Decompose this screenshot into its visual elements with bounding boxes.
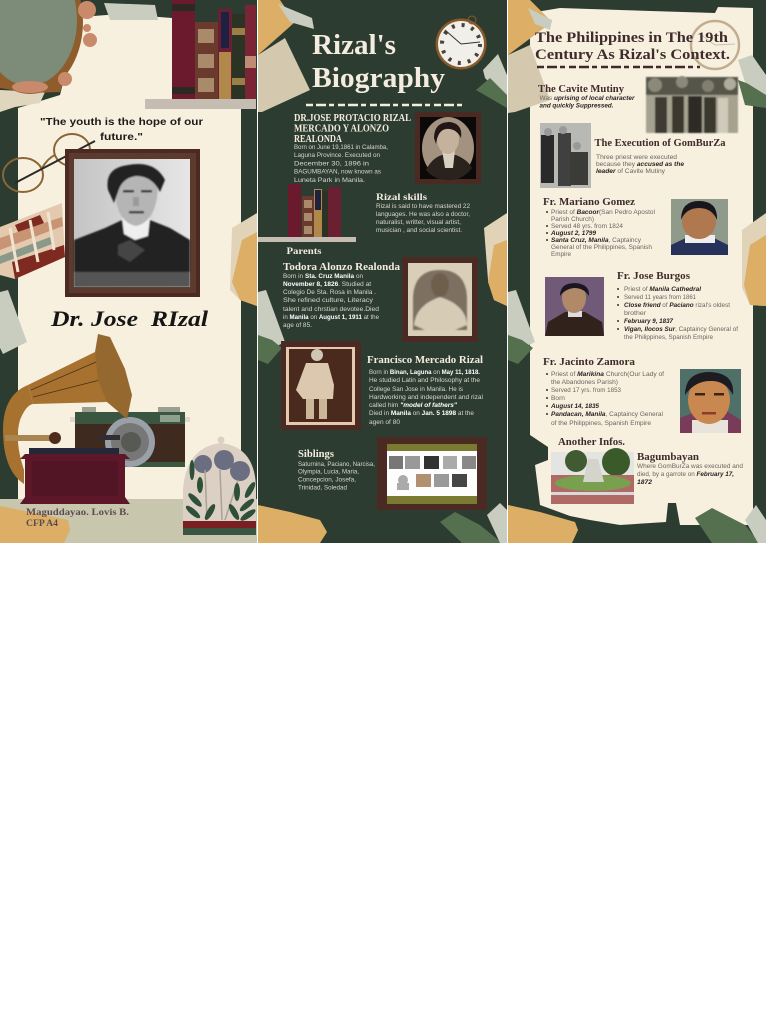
icon: oval mirror bbox=[0, 0, 97, 94]
tape left bbox=[0, 290, 27, 354]
panel: biography bbox=[258, 0, 507, 543]
torn scraps top-left bbox=[508, 0, 552, 113]
text: siblings: Concepcion, Josefa, bbox=[298, 476, 356, 484]
text: Rizal skills: Rizal is said to have mastered 22 bbox=[376, 203, 470, 210]
text: Mariano Gomez: General of the Philippines, Spanish bbox=[551, 244, 652, 251]
icon: glasses bbox=[3, 134, 95, 192]
torn scraps top-left bbox=[258, 0, 314, 112]
text: Cavite Mutiny: and quickly Suppressed. bbox=[540, 102, 614, 110]
text: Mariano Gomez: August 2, 1799 bbox=[550, 230, 596, 237]
text: Jose Burgos: Close friend of Paciano rizal's oldest bbox=[624, 302, 730, 309]
text: Bagumbayan: 1872 bbox=[637, 479, 652, 486]
text: siblings: Olympia, Lucia, Maria, bbox=[298, 468, 359, 476]
title: Biography bbox=[312, 63, 445, 94]
tape and leaf left bbox=[258, 290, 285, 364]
text: Execution: because they accused as the bbox=[596, 161, 684, 168]
text: Cavite Mutiny: The Cavite Mutiny bbox=[538, 84, 624, 95]
text: name heading bbox=[294, 113, 411, 145]
leaf and tape bottom-right bbox=[440, 503, 507, 543]
signature: Dr. Jose RIzal bbox=[50, 306, 209, 331]
portrait: Francisco bbox=[281, 341, 361, 430]
text: Francisco: Francisco Mercado Rizal bbox=[367, 355, 483, 366]
title: The Philippines in The 19th bbox=[535, 30, 729, 46]
text: Jacinto Zamora bbox=[543, 357, 664, 427]
text: Todora: in Manila on August 1, 1911 at the bbox=[283, 314, 379, 321]
heading: Another Infos: Another Infos. bbox=[558, 437, 625, 448]
text: birth and death: Born on June 19,1861 in Calamba, bbox=[294, 144, 388, 151]
portrait: Todora bbox=[402, 257, 478, 342]
text: Jose Burgos: February 9, 1837 bbox=[624, 318, 674, 325]
title bbox=[535, 30, 730, 63]
text: birth and death: Luneta Park in Manila. bbox=[294, 177, 365, 184]
photo: siblings bbox=[377, 437, 487, 510]
text: siblings bbox=[298, 449, 375, 492]
text: Rizal skills: languages. He was also a doctor, bbox=[376, 211, 470, 218]
icon: gramophone bbox=[3, 334, 132, 504]
torn scrap right bbox=[742, 213, 766, 306]
text: Bagumbayan: died, by a garrote on February 17, bbox=[637, 471, 734, 478]
text: Jacinto Zamora: Priest of Marikina Church(Our Lady of bbox=[551, 371, 664, 378]
text: Jose Burgos: Fr. Jose Burgos bbox=[617, 271, 690, 282]
text: Todora: Sta. Cruz Manila bbox=[305, 273, 354, 280]
portrait: young Rizal bbox=[415, 112, 481, 184]
text: Todora: Colegio De Sta. Rosa in Manila . bbox=[283, 289, 376, 296]
tape and leaf left bbox=[508, 290, 535, 364]
text: Mariano Gomez: Empire bbox=[551, 251, 571, 258]
text: Cavite Mutiny bbox=[538, 84, 635, 110]
text: Jose Burgos bbox=[617, 271, 738, 341]
text: Todora: November 8, 1826. Studied at bbox=[283, 281, 371, 288]
text: Execution: Three priest were executed bbox=[596, 154, 677, 161]
text: Mariano Gomez: Santa Cruz, Manila, Captaincy bbox=[551, 237, 642, 244]
icon: clock bbox=[436, 16, 486, 70]
icon: textile bbox=[0, 203, 65, 279]
quote: future." bbox=[100, 131, 143, 143]
text: Francisco: called him "model of fathers" bbox=[369, 402, 458, 409]
photo: Bagumbayan bbox=[551, 448, 634, 504]
title bbox=[312, 30, 445, 94]
title: Century As Rizal's Context. bbox=[535, 47, 730, 63]
text: name heading: MERCADO Y ALONZO bbox=[294, 124, 389, 134]
shelf small bbox=[258, 237, 356, 242]
text: Jacinto Zamora: the Abandones Parish) bbox=[551, 379, 618, 386]
torn paper under mirror bbox=[0, 90, 45, 112]
text: siblings: Saturnina, Paciano, Narcisa, bbox=[298, 461, 375, 468]
text: Jacinto Zamora: Fr. Jacinto Zamora bbox=[543, 357, 636, 368]
author: CFP A4 bbox=[26, 518, 59, 528]
icon: books bbox=[172, 0, 256, 99]
text: Rizal skills bbox=[376, 193, 470, 234]
text: Francisco bbox=[367, 355, 483, 426]
text: Rizal skills: musician , and social scientist. bbox=[376, 227, 462, 234]
text: siblings: Trinidad, Soledad bbox=[298, 484, 347, 492]
text: Bagumbayan bbox=[637, 452, 743, 486]
shelf bbox=[145, 99, 256, 109]
author bbox=[26, 507, 129, 528]
portrait: Zamora bbox=[680, 369, 741, 433]
quote: "The youth is the hope of our bbox=[40, 116, 203, 128]
icon: books small bbox=[288, 184, 341, 237]
portrait frame bbox=[65, 149, 200, 297]
text: Todora: Born in bbox=[283, 273, 303, 280]
text: Mariano Gomez: Parish Church) bbox=[551, 216, 594, 223]
tape and leaf top-right bbox=[476, 54, 507, 108]
text: Mariano Gomez: Served 48 yrs. from 1824 bbox=[551, 223, 623, 230]
torn scrap right bbox=[230, 213, 257, 306]
torn scrap bottom-left bbox=[258, 505, 327, 543]
text: Jacinto Zamora: Born bbox=[551, 395, 565, 402]
text: Jose Burgos: the Philippines, Spanish Empire bbox=[624, 334, 713, 341]
text: Francisco: Born in Binan, Laguna on May 11, 1818. bbox=[369, 369, 480, 376]
torn scrap bottom-left bbox=[508, 505, 578, 543]
text: Execution: The Execution of GomBurZa bbox=[594, 138, 726, 149]
torn scrap bottom-left bbox=[0, 506, 70, 543]
photo: Cavite soldiers bbox=[646, 76, 738, 133]
dashed divider bbox=[537, 66, 700, 68]
table bbox=[0, 499, 257, 543]
text: Bagumbayan: Where GomBurZa was executed and bbox=[637, 463, 743, 470]
paper sheet bbox=[18, 14, 241, 543]
text: birth and death: Laguna Province. Executed on bbox=[294, 152, 380, 159]
author: Maguddayao. Lovis B. bbox=[26, 507, 129, 517]
text: Francisco: agen of 80 bbox=[369, 419, 400, 426]
text: Execution: leader of Cavite Mutiny bbox=[596, 168, 666, 175]
text: Francisco: Died in Manila on Jan. 5 1898 at the bbox=[369, 410, 474, 417]
text: siblings: Siblings bbox=[298, 449, 334, 460]
text: Jacinto Zamora: Served 17 yrs. from 1853 bbox=[551, 387, 621, 394]
torn scrap right bbox=[484, 213, 507, 306]
icon: faded clock bbox=[691, 21, 739, 69]
text: birth and death: December 30, 1896 in bbox=[294, 160, 369, 168]
text: Jacinto Zamora: August 14, 1835 bbox=[550, 403, 599, 410]
paper sheet bbox=[530, 7, 753, 525]
tape and leaf right bbox=[738, 55, 766, 108]
photo: GomBurZa bbox=[540, 123, 591, 188]
portrait: Burgos bbox=[545, 277, 604, 336]
portrait: Gomez bbox=[671, 199, 728, 255]
text: Cavite Mutiny: Was uprising of local character bbox=[540, 95, 635, 102]
text: Francisco: Hardworking and independent and rizal bbox=[369, 394, 483, 401]
text: Francisco: He studied Latin and Philosophy at the bbox=[369, 377, 480, 384]
panel: cover bbox=[0, 0, 257, 543]
text: Todora: age of 85. bbox=[283, 322, 312, 329]
text: Todora: Todora Alonzo Realonda bbox=[283, 262, 400, 273]
text: Bagumbayan: Bagumbayan bbox=[637, 452, 699, 463]
text: Rizal skills: naturalist, writter, visual artist, bbox=[376, 219, 461, 226]
text: Jacinto Zamora: of the Philippines, Spanish Empire bbox=[551, 420, 651, 427]
text: Todora: on bbox=[356, 273, 363, 280]
text: Jose Burgos: brother bbox=[624, 310, 647, 317]
text: Rizal skills: Rizal skills bbox=[376, 193, 427, 203]
leaf and tape bottom-right bbox=[695, 505, 766, 543]
text: name heading: REALONDA bbox=[294, 134, 343, 145]
icon: camera bbox=[70, 407, 190, 467]
text: Todora: She refined culture, Literacy bbox=[283, 297, 374, 304]
text: Jose Burgos: Priest of Manila Cathedral bbox=[624, 286, 701, 293]
text: Jose Burgos: Vigan, Ilocos Sur, Captaincy General of bbox=[624, 326, 738, 333]
panel: 19th century context bbox=[508, 0, 766, 543]
heading: parents: Parents bbox=[286, 247, 322, 257]
text: name heading: DR.JOSE PROTACIO RIZAL bbox=[294, 113, 411, 124]
text: Jacinto Zamora: Pandacan, Manila, Captaincy General bbox=[551, 411, 663, 418]
quote bbox=[40, 116, 203, 143]
text: Mariano Gomez bbox=[543, 197, 655, 258]
text: Mariano Gomez: Fr. Mariano Gomez bbox=[543, 197, 635, 208]
dashed divider bbox=[306, 104, 463, 106]
text: Jose Burgos: Served 11 years from 1861 bbox=[624, 294, 696, 301]
text: Todora bbox=[283, 262, 400, 329]
text: Execution bbox=[594, 138, 726, 175]
text: Mariano Gomez: Priest of Bacoor(San Pedro Apostol bbox=[551, 209, 655, 216]
tape bbox=[104, 3, 158, 20]
icon: bell jar with flowers bbox=[183, 436, 257, 535]
text: birth and death: BAGUMBAYAN, now known as bbox=[294, 168, 382, 176]
portrait photo bbox=[74, 164, 190, 287]
text: Francisco: College San Jose in Manila. He is bbox=[369, 386, 464, 393]
text: Todora: talent and chrstian devotee.Died bbox=[283, 306, 379, 313]
text: birth and death bbox=[294, 144, 388, 184]
title: Rizal's bbox=[312, 30, 396, 61]
